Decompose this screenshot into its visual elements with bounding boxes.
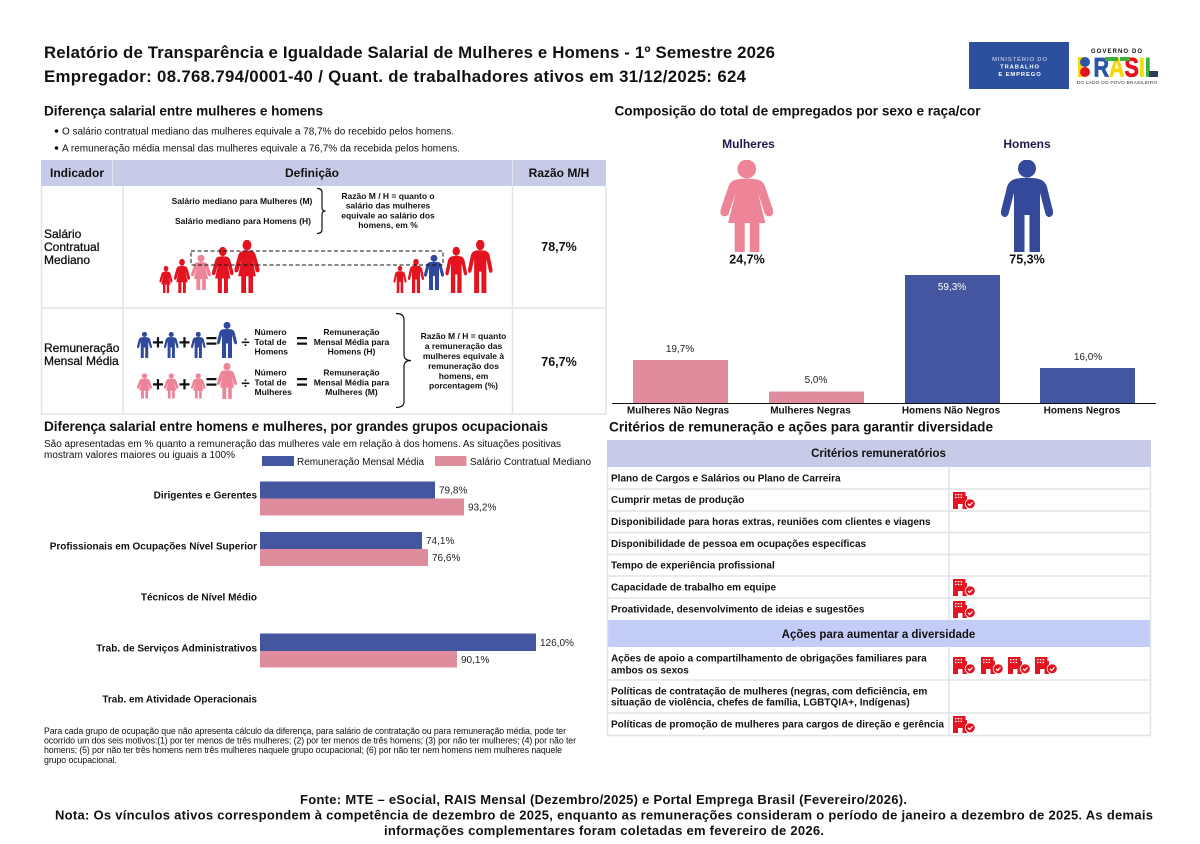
logo: Ministério do Trabalho e Emprego: E EMPREGO <box>998 72 1042 78</box>
bar: Homens Negros <box>1040 352 1135 416</box>
criteria list: Disponibilidade para horas extras, reuniões com clientes e viagens <box>611 517 931 528</box>
icon: company check, produção <box>953 492 975 509</box>
title: Empregador: 08.768.794/0001-40 / Quant. de trabalhadores ativos em 31/12/2025: 624 <box>44 67 747 86</box>
footnote: Para cada grupo de ocupação que não apresenta cálculo da diferença, para salário de contratação ou para remuneração média, pode ter <box>44 726 566 736</box>
group: Dirigentes e Gerentes: 79,8% <box>439 486 467 496</box>
ratio explanation: a remuneração das <box>425 341 503 351</box>
formula: men: Remuneração <box>323 327 380 337</box>
ratio explanation: homens, em % <box>358 220 418 230</box>
criteria list: Plano de Cargos e Salários ou Plano de Carreira <box>611 474 841 484</box>
row label: Mediano <box>44 253 90 267</box>
group: Serviços Administrativos: 126,0% <box>540 638 574 649</box>
group: Profissionais <box>50 532 460 566</box>
icon: company check, proatividade <box>953 601 975 618</box>
formula: women: Mulheres (M) <box>325 387 378 397</box>
bar chart: grupos ocupacionais <box>50 482 574 706</box>
formula: men: = <box>296 331 308 353</box>
group: Profissionais: 74,1% <box>426 536 454 547</box>
pictogram: mulheres: Mulheres <box>722 137 775 151</box>
criteria list: Proatividade, desenvolvimento de ideias e sugestões <box>611 604 865 616</box>
ratio explanation <box>341 191 435 230</box>
formula: men: = <box>206 331 217 353</box>
chart description <box>44 439 561 461</box>
criteria list: Cumprir metas de produção <box>611 495 744 506</box>
title <box>44 43 775 86</box>
criteria list: Disponibilidade de pessoa em ocupações específicas <box>611 539 867 550</box>
table header: Indicador <box>50 166 104 180</box>
criteria list: Capacidade de trabalho em equipe <box>611 582 776 594</box>
footer: fonte e nota <box>55 792 1153 838</box>
row label <box>44 341 120 368</box>
ratio explanation: salário das mulheres <box>346 200 431 210</box>
actions list: ambos os sexos <box>611 666 689 676</box>
formula: women: ÷ <box>241 375 250 392</box>
formula: women: Total de <box>254 378 287 388</box>
formula: women: Número <box>254 368 287 378</box>
bar: Mulheres Não Negras: 19,7% <box>666 344 694 355</box>
row: salário contratual mediano <box>44 188 577 293</box>
ratio explanation: remuneração dos <box>428 361 499 371</box>
group: Dirigentes e Gerentes: Dirigentes e Gerentes <box>154 490 257 502</box>
bullet list: O salário contratual mediano das mulheres equivale a 78,7% do recebido pelos homens. <box>62 126 454 138</box>
bar: Homens Não Negros: 59,3% <box>938 282 966 293</box>
icon: company check, promoção <box>953 716 975 733</box>
formula: men: Total de <box>254 337 287 347</box>
formula: men: ÷ <box>241 334 250 351</box>
bar: Mulheres Não Negras: Mulheres Não Negras <box>627 406 730 416</box>
group: Serviços Administrativos: 90,1% <box>461 655 489 666</box>
formula: men: Homens (H) <box>328 346 376 356</box>
heading: critérios: Critérios de remuneração e ações para garantir diversidade <box>609 420 993 434</box>
formula: men: Número <box>254 327 287 337</box>
chart description: São apresentadas em % quanto a remuneração das mulheres vale em relação à dos homens. As situações positivas <box>44 439 561 450</box>
chart description: mostram valores maiores ou iguais a 100% <box>44 450 235 461</box>
ratio explanation: mulheres equivale à <box>423 351 504 361</box>
pictogram: homens <box>1001 137 1053 266</box>
formula: men: Homens <box>254 346 288 356</box>
actions list: situação de violência, chefes de família, LGBTQIA+, Indígenas) <box>611 698 910 708</box>
group: Profissionais: Profissionais em Ocupações Nível Superior <box>50 542 257 552</box>
actions list: Políticas de contratação de mulheres (negras, com deficiência, em <box>611 686 927 698</box>
header: ações: Ações para aumentar a diversidade <box>782 629 975 641</box>
ratio explanation: Razão M / H = quanto o <box>341 191 435 201</box>
row label <box>44 227 99 267</box>
heading: composição: Composição do total de empregados por sexo e raça/cor <box>614 104 981 118</box>
formula: women: + <box>179 374 190 396</box>
icons: women <box>159 240 260 293</box>
footer: fonte e nota: Fonte: MTE – eSocial, RAIS Mensal (Dezembro/2025) e Portal Emprega Brasil (Fevereiro/2026). <box>300 792 907 807</box>
table header: Definição <box>285 166 339 180</box>
footnote: grupo ocupacional. <box>44 755 117 765</box>
value: 76,7% <box>541 355 577 369</box>
formula: women: Mulheres <box>254 387 292 397</box>
definition labels: Salário mediano para Mulheres (M) <box>172 196 313 206</box>
heading: grupos ocupacionais: Diferença salarial entre homens e mulheres, por grandes grupos ocupacionais <box>44 419 548 434</box>
row label: Contratual <box>44 240 99 254</box>
row label: Mensal Média <box>44 354 119 368</box>
header: critérios remuneratórios: Critérios remuneratórios <box>811 448 946 460</box>
definition labels <box>172 196 313 226</box>
group: Atividade Operacionais: Trab. em Atividade Operacionais <box>102 694 257 706</box>
header: ações <box>607 620 1151 647</box>
bullet list <box>55 126 460 154</box>
logo: Ministério do Trabalho e Emprego: MINISTÉRIO DO <box>992 56 1048 63</box>
formula: men <box>137 322 390 358</box>
actions list: Políticas de promoção de mulheres para cargos de direção e gerência <box>611 720 944 730</box>
bar chart: sexo e raça/cor <box>612 275 1156 416</box>
group: Dirigentes e Gerentes: 93,2% <box>468 502 496 514</box>
definition labels: Salário mediano para Homens (H) <box>175 216 311 226</box>
row: remuneração mensal média <box>44 314 577 408</box>
bar: Homens Negros: 16,0% <box>1074 352 1102 363</box>
formula: men: + <box>152 332 164 354</box>
bullet list: A remuneração média mensal das mulheres equivale a 76,7% da recebida pelos homens. <box>62 144 460 154</box>
actions list <box>611 654 944 730</box>
ratio explanation: equivale ao salário dos <box>341 210 435 220</box>
brace <box>317 188 326 234</box>
formula: women: + <box>152 374 164 396</box>
ratio explanation: homens, em <box>439 371 489 381</box>
logo: Ministério do Trabalho e Emprego <box>969 42 1069 89</box>
bar: Mulheres Negras: 5,0% <box>805 375 828 386</box>
formula: women: Mensal Média para <box>314 378 390 388</box>
logo: Ministério do Trabalho e Emprego: TRABALHO <box>1000 64 1040 70</box>
footer: fonte e nota: Nota: Os vínculos ativos correspondem à competência de dezembro de 2025, enquanto as remunerações consideram o período de janeiro a dezembro de 2025. As demais <box>55 808 1153 822</box>
group: Serviços Administrativos <box>96 634 574 668</box>
median highlight box <box>191 251 443 265</box>
title: Relatório de Transparência e Igualdade Salarial de Mulheres e Homens - 1º Semestre 2026 <box>44 43 775 62</box>
row label: Salário <box>44 227 82 241</box>
formula: women <box>137 363 390 399</box>
formula: women: = <box>206 372 217 394</box>
footnote <box>44 726 576 765</box>
group: Serviços Administrativos: Trab. de Serviços Administrativos <box>96 644 257 654</box>
criteria list <box>611 474 931 616</box>
table header <box>41 160 606 186</box>
group: Técnicos: Técnicos de Nível Médio <box>141 592 257 604</box>
panel: tabela de indicadores <box>41 160 606 414</box>
pictogram: homens: Homens <box>1003 137 1051 151</box>
icons: men <box>393 240 493 293</box>
legend <box>262 456 591 468</box>
formula: men: Mensal Média para <box>314 337 390 347</box>
group: Dirigentes e Gerentes <box>154 482 496 516</box>
formula: women: Remuneração <box>323 368 380 378</box>
ratio explanation: porcentagem (%) <box>429 380 498 390</box>
footer: fonte e nota: informações complementares foram coletadas em fevereiro de 2026. <box>384 823 824 838</box>
header: critérios remuneratórios <box>607 440 1151 467</box>
table header: Razão M/H <box>529 166 589 180</box>
bar: Homens Negros: Homens Negros <box>1044 406 1121 416</box>
logo: Governo do Brasil: DO LADO DO POVO BRASILEIRO <box>1077 80 1157 86</box>
bar: Mulheres Negras: Mulheres Negras <box>770 406 851 416</box>
criteria list: Tempo de experiência profissional <box>611 560 775 572</box>
formula: women: = <box>296 372 308 394</box>
brace <box>396 314 411 408</box>
legend: Remuneração Mensal Média <box>297 457 424 468</box>
pictogram: mulheres: 24,7% <box>729 252 765 266</box>
ratio explanation <box>421 331 506 390</box>
group: Profissionais: 76,6% <box>432 553 460 564</box>
footnote: ocorrido um dos seis motivos:(1) por ter menos de três mulheres; (2) por ter menos de três homens; (3) por não ter mulheres; (4) por não ter <box>44 736 576 746</box>
bar: Homens Não Negros <box>902 275 1001 416</box>
row label: Remuneração <box>44 341 120 355</box>
panel: critérios e ações <box>607 440 1151 736</box>
formula: men: + <box>179 332 190 354</box>
ratio explanation: Razão M / H = quanto <box>421 331 506 341</box>
footnote: homens; (5) por não ter três homens nem três mulheres naquele grupo ocupacional; (6) por não ter nem homens nem mulheres naquele <box>44 745 562 755</box>
logo: Governo do Brasil: GOVERNO DO <box>1091 49 1143 55</box>
pictogram: homens: 75,3% <box>1009 252 1045 266</box>
bar: Mulheres Negras <box>769 375 864 416</box>
value: 78,7% <box>541 240 577 254</box>
legend: Salário Contratual Mediano <box>470 457 591 468</box>
icon: company check, equipe <box>953 579 975 596</box>
actions list: Ações de apoio a compartilhamento de obrigações familiares para <box>611 654 927 664</box>
icons: company check, apoio familiar <box>953 657 1057 674</box>
pictogram: mulheres <box>720 137 775 266</box>
bar: Mulheres Não Negras <box>627 344 730 416</box>
heading: diferença salarial: Diferença salarial entre mulheres e homens <box>44 104 323 118</box>
bar: Homens Não Negros: Homens Não Negros <box>902 406 1001 416</box>
